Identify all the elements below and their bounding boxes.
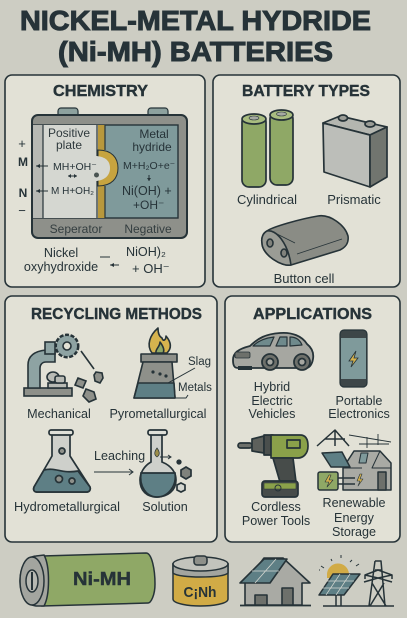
diagram: battery cell: M+H₂O+e⁻	[123, 160, 176, 172]
panel: battery types	[213, 75, 400, 287]
heading: battery types: BATTERY TYPES	[242, 83, 370, 100]
diagram: battery cell: plate	[56, 138, 82, 152]
footer icon: CiNh cell	[173, 556, 228, 606]
reaction equation: oxyhydroxide	[24, 260, 98, 274]
diagram: battery cell: Negative	[124, 222, 172, 236]
label: hybrid electric vehicles: Electric	[251, 394, 293, 408]
diagram: battery cell: Ni(OH) +	[122, 184, 172, 198]
icon: cordless drill	[238, 435, 308, 497]
icon: hydrometallurgical flask	[34, 430, 90, 492]
panel: applications	[225, 296, 400, 542]
diagram: battery cell: Positive	[48, 126, 90, 140]
label: cordless power tools	[242, 500, 310, 528]
heading: chemistry: CHEMISTRY	[53, 83, 148, 100]
icon: hybrid car	[233, 333, 313, 370]
heading: recycling methods: RECYCLING METHODS	[31, 306, 202, 323]
icon: smartphone	[340, 330, 367, 387]
reaction equation: NiOH)₂	[126, 245, 166, 259]
polarity labels: +	[18, 136, 26, 151]
footer icon: CiNh cell: C¡Nh	[184, 584, 216, 601]
label: slag and metals: Metals	[178, 382, 212, 394]
label: solution: Solution	[142, 500, 188, 514]
label: renewable energy storage	[322, 496, 386, 539]
label: slag and metals	[178, 356, 212, 394]
label: prismatic: Prismatic	[327, 192, 381, 207]
polarity labels: −	[18, 203, 26, 218]
footer icon: Ni-MH battery: Ni-MH	[73, 569, 131, 589]
label: portable electronics	[328, 394, 390, 421]
arrow: leaching	[94, 449, 145, 475]
diagram: battery cell: Metal	[139, 127, 169, 141]
label: renewable energy storage: Energy	[334, 511, 375, 525]
label: button cell: Button cell	[274, 271, 334, 286]
label: hybrid electric vehicles: Vehicles	[249, 407, 295, 421]
polarity labels	[18, 136, 28, 218]
title: NICKEL-METAL HYDRIDE	[20, 5, 371, 36]
polarity labels: M	[18, 155, 28, 169]
label: hydrometallurgical: Hydrometallurgical	[14, 500, 120, 514]
diagram: battery cell: Seperator	[50, 222, 102, 236]
label: cordless power tools: Cordless	[251, 500, 301, 514]
label: hybrid electric vehicles	[249, 380, 295, 421]
label: renewable energy storage: Renewable	[322, 496, 386, 510]
polarity labels: N	[19, 186, 27, 200]
icon: prismatic battery	[323, 115, 387, 187]
diagram: battery cell: M H+OH₂	[51, 186, 94, 197]
footer icon: solar panel and pylon	[319, 555, 394, 606]
label: pyrometallurgical: Pyrometallurgical	[110, 407, 206, 421]
reaction equation: + OH⁻	[132, 261, 170, 276]
icon: button cell	[262, 216, 348, 265]
label: mechanical: Mechanical	[27, 407, 91, 421]
icon: solution flask	[140, 430, 191, 497]
panel: chemistry	[5, 75, 205, 287]
reaction equation: Nickel	[44, 246, 78, 260]
label: slag and metals: Slag	[188, 356, 211, 368]
label: hybrid electric vehicles: Hybrid	[254, 380, 290, 394]
icon: cylindrical batteries	[242, 110, 293, 187]
label: portable electronics: Portable	[336, 394, 382, 408]
diagram: battery cell: +OH⁻	[133, 198, 164, 212]
label: renewable energy storage: Storage	[332, 525, 376, 539]
title	[20, 5, 371, 67]
title: (Ni-MH) BATTERIES	[58, 36, 333, 67]
diagram: battery cell	[32, 108, 187, 238]
label: portable electronics: Electronics	[328, 407, 390, 421]
label: cylindrical: Cylindrical	[237, 192, 297, 207]
diagram: battery cell: MH+OH⁻	[53, 161, 97, 173]
footer icon: Ni-MH battery	[20, 553, 155, 606]
footer icon: solar house	[240, 558, 311, 606]
label: cordless power tools: Power Tools	[242, 514, 310, 528]
panel: recycling methods	[5, 296, 217, 542]
icon: renewable energy storage	[317, 430, 391, 490]
heading: applications: APPLICATIONS	[253, 306, 372, 323]
diagram: battery cell: hydride	[132, 140, 172, 154]
icon: mechanical shredder	[24, 335, 103, 402]
reaction equation	[24, 245, 170, 276]
arrow: leaching: Leaching	[94, 449, 145, 463]
icon: pyrometallurgical furnace	[134, 328, 195, 398]
